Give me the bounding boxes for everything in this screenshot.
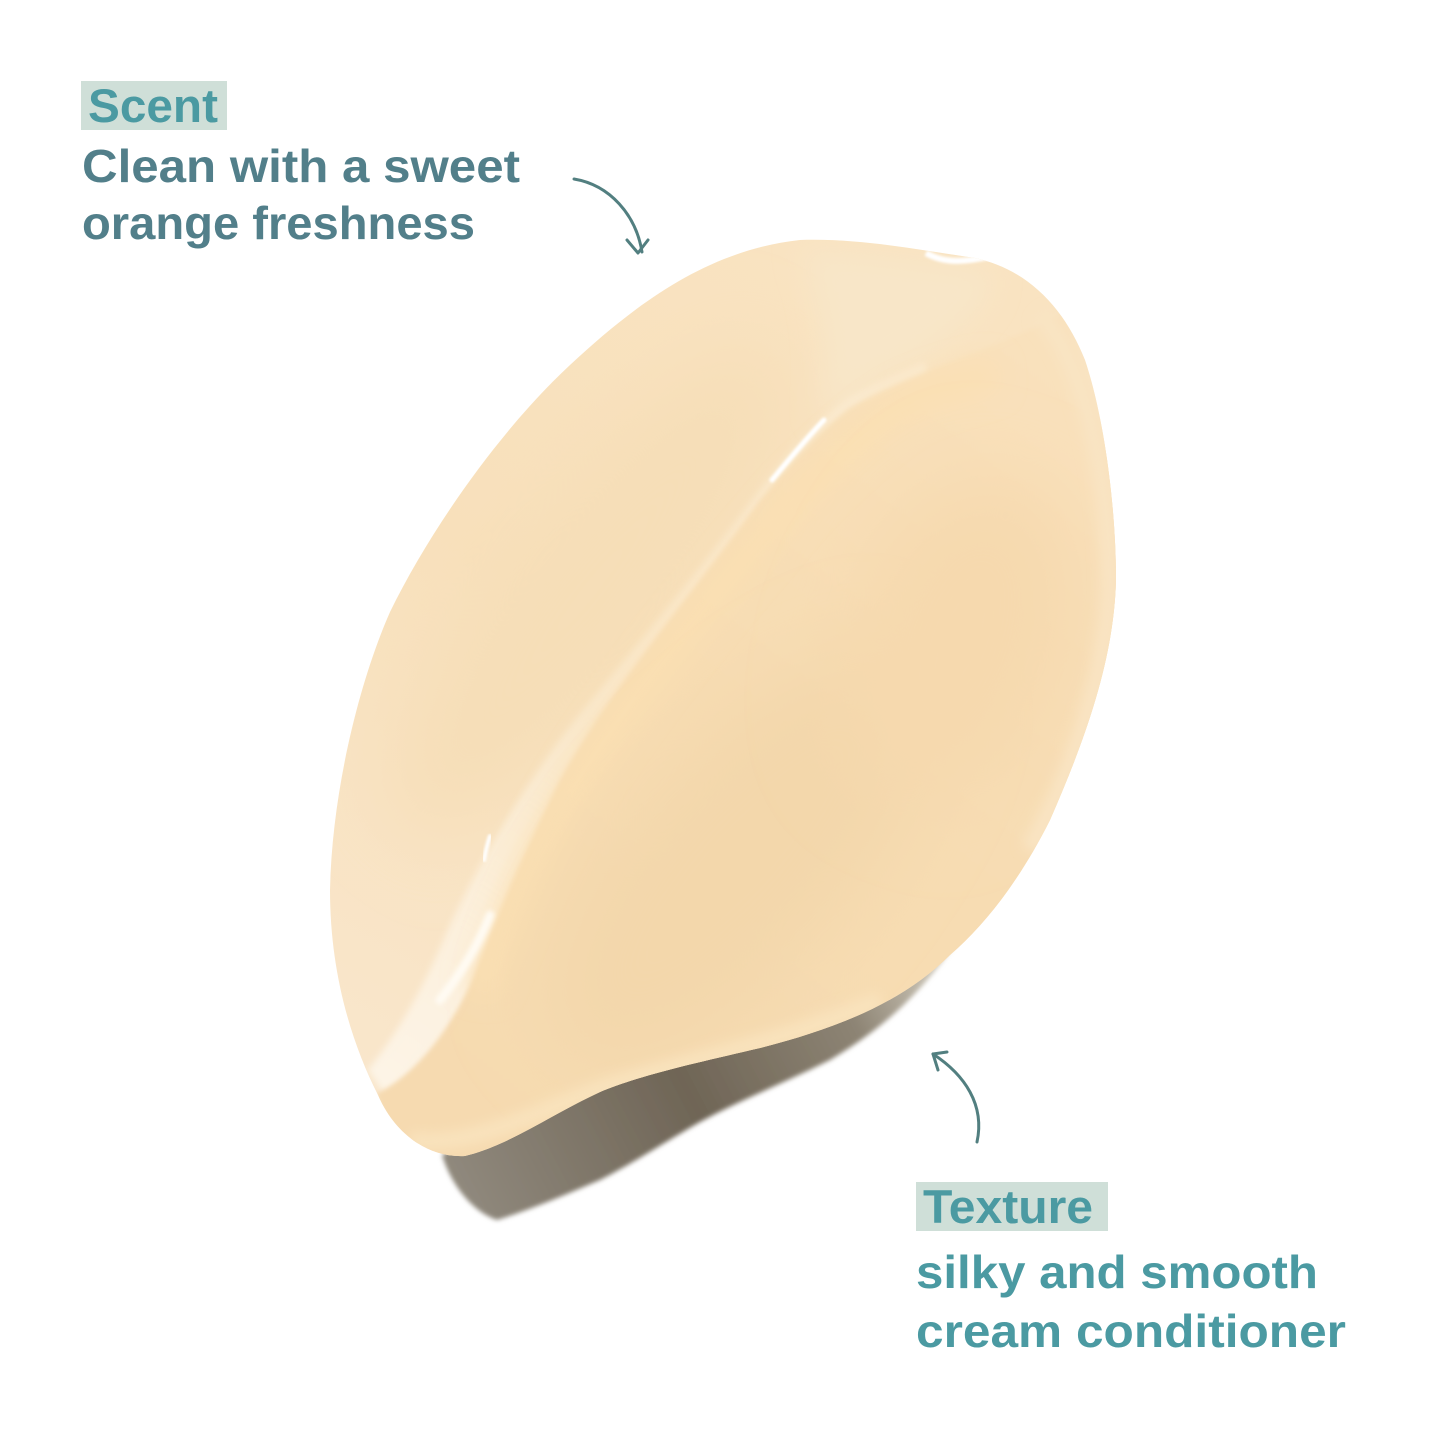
texture description: silky and smooth bbox=[916, 1246, 1318, 1298]
right lobe bbox=[376, 314, 1125, 1170]
arrow: scent to swatch bbox=[574, 179, 648, 253]
arrow: texture to swatch bbox=[933, 1052, 979, 1142]
callout: texture: cream conditioner bbox=[916, 1305, 1346, 1357]
glossy band beside crease bbox=[368, 362, 930, 1095]
callout: scent bbox=[81, 79, 520, 249]
bottom lighter rim bbox=[410, 1000, 880, 1142]
upper pale sheen bbox=[836, 292, 882, 378]
right lighter rim bbox=[1026, 494, 1116, 850]
left lobe soft shading bbox=[436, 706, 508, 784]
scent description: Clean with a sweet bbox=[82, 140, 520, 192]
texture label tag bbox=[916, 1182, 1108, 1231]
cream body bbox=[330, 240, 1116, 1156]
scent label tag bbox=[81, 81, 227, 130]
cast shadow under swatch bbox=[442, 945, 955, 1220]
cream conditioner swatch bbox=[300, 220, 1140, 1220]
right lobe warm shading bbox=[484, 593, 996, 1127]
left lobe base bbox=[330, 240, 1116, 1156]
top white highlight bbox=[924, 251, 986, 265]
infographic canvas bbox=[81, 81, 1346, 1348]
callout: scent: orange freshness bbox=[82, 197, 475, 249]
white gloss on lower crease bbox=[440, 915, 490, 1000]
callout: texture bbox=[916, 1180, 1346, 1357]
texture heading: Texture bbox=[923, 1180, 1093, 1233]
white gloss on upper crease bbox=[772, 420, 824, 480]
scent heading: Scent bbox=[88, 79, 218, 132]
warm streak along crease bbox=[464, 755, 570, 986]
